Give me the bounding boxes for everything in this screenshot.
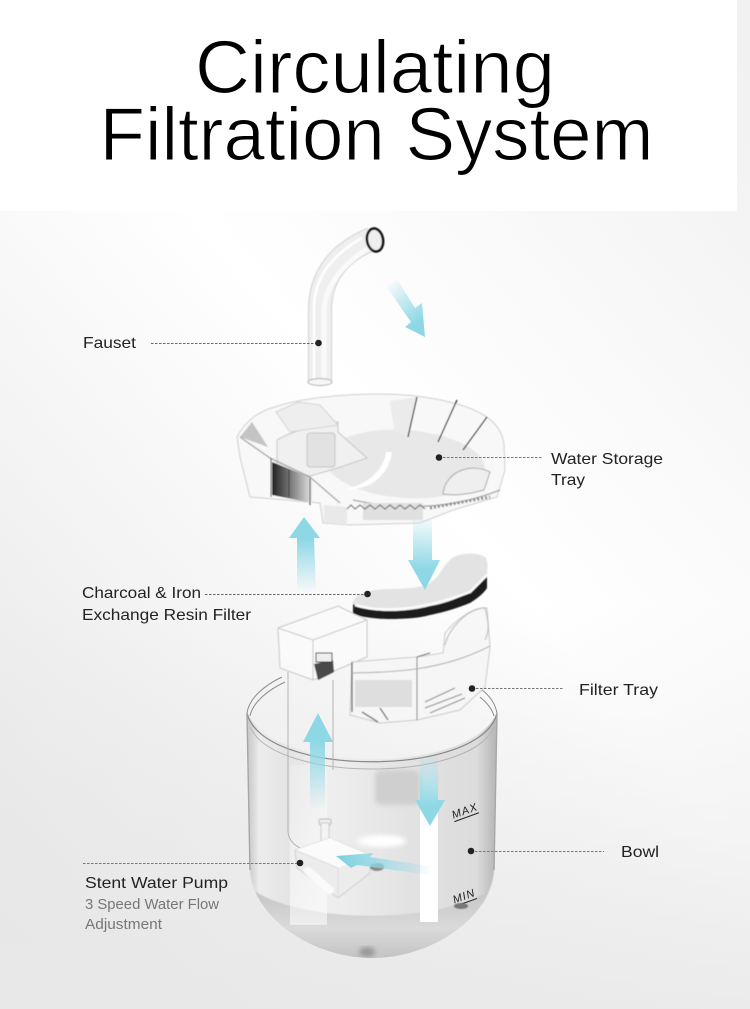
title <box>100 25 654 176</box>
callout: charcoal filter: Exchange Resin Filter <box>82 607 252 624</box>
callout: water storage tray: Water Storage <box>551 451 663 468</box>
faucet <box>308 227 385 386</box>
callout: charcoal filter <box>82 585 371 624</box>
water pump <box>295 819 384 898</box>
tray basket <box>350 608 490 723</box>
callout: water storage tray <box>436 451 663 489</box>
callout: water storage tray: Tray <box>551 472 585 489</box>
tray ribs <box>408 397 487 450</box>
level marks <box>450 801 480 906</box>
callout: water pump <box>83 860 303 933</box>
tray floor <box>323 425 487 503</box>
tray front dark panel <box>272 462 312 503</box>
arrow: into pump <box>336 853 430 875</box>
water storage tray <box>237 394 505 525</box>
arrow: down through filter <box>408 520 440 590</box>
bowl rim <box>247 677 497 716</box>
arrow: down inside bowl <box>415 757 445 826</box>
bowl body <box>247 713 497 958</box>
callout: bowl <box>468 844 659 861</box>
title: Filtration System <box>100 92 654 176</box>
arrow: up to tray <box>289 517 320 592</box>
callout: bowl: Bowl <box>621 844 659 861</box>
max mark: MAX <box>450 801 480 822</box>
min mark: MIN <box>451 887 477 906</box>
callout: water pump: Adjustment <box>85 916 163 933</box>
tray comb detail <box>324 505 347 525</box>
filter tray with chamber <box>278 606 490 723</box>
callout: fauset <box>83 335 322 352</box>
arrow: up inside bowl <box>303 713 333 810</box>
callout: filter tray <box>469 682 658 699</box>
bowl <box>247 672 497 960</box>
callout: filter tray: Filter Tray <box>579 682 658 699</box>
title: Circulating <box>195 25 555 109</box>
arrow: from faucet to tray <box>386 279 425 337</box>
callout: water pump: Stent Water Pump <box>85 875 228 892</box>
bowl base band <box>255 891 488 958</box>
charcoal filter sponge <box>353 554 488 619</box>
white title band <box>0 0 737 211</box>
callout: water pump: 3 Speed Water Flow <box>85 896 219 913</box>
bowl reflections <box>290 823 327 925</box>
outflow chamber <box>278 606 367 680</box>
callout: fauset: Fauset <box>83 335 137 352</box>
tray outer wall <box>237 394 505 525</box>
callout: charcoal filter: Charcoal & Iron <box>82 585 201 602</box>
